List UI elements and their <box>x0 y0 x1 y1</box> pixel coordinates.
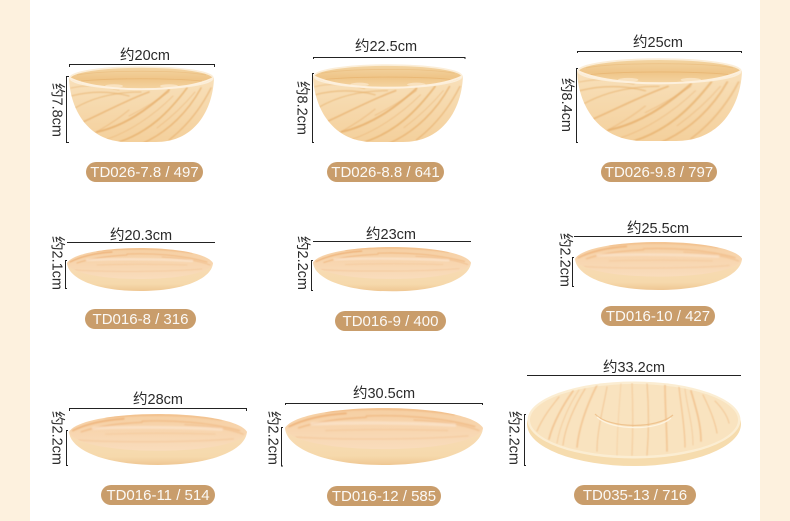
model label: TD016-12 / 585 <box>332 488 436 505</box>
left cream band <box>0 0 30 521</box>
width label: 约23cm <box>366 226 416 243</box>
plate image <box>69 414 247 465</box>
right cream band <box>760 0 790 521</box>
panel: plate TD016-11 <box>48 391 247 505</box>
panel: plate TD016-8 <box>48 227 215 329</box>
model label: TD016-10 / 427 <box>606 308 710 325</box>
height dimension: 约2.2cm <box>294 236 311 290</box>
panel: tray TD035-13 <box>506 359 741 505</box>
height dimension <box>48 76 69 142</box>
width dimension: 约22.5cm <box>355 38 417 55</box>
plate image <box>67 248 213 291</box>
model label: TD016-8 / 316 <box>93 311 188 328</box>
width label: 约25.5cm <box>627 220 689 237</box>
width label: 约20.3cm <box>110 227 172 244</box>
panel: plate TD016-9 <box>294 226 471 331</box>
height dimension: 约2.2cm <box>48 411 66 465</box>
model label: TD035-13 / 716 <box>583 487 687 504</box>
height dimension <box>294 74 314 142</box>
plate image <box>285 408 483 465</box>
plate image <box>313 247 471 291</box>
bowl image <box>69 67 214 144</box>
height dimension <box>558 68 578 142</box>
height dimension: 约7.8cm <box>48 83 66 137</box>
width dimension <box>527 374 741 376</box>
width dimension <box>313 240 471 242</box>
height dimension: 约2.2cm <box>506 411 522 465</box>
width label: 约30.5cm <box>353 385 415 402</box>
panel: plate TD016-10 <box>556 220 742 326</box>
width dimension: 约20cm <box>120 47 170 64</box>
width dimension <box>67 242 215 244</box>
width dimension: 约25cm <box>633 34 683 51</box>
model label: TD016-11 / 514 <box>106 487 210 504</box>
bowl image <box>577 59 742 143</box>
model label: TD016-9 / 400 <box>343 313 438 330</box>
width dimension <box>286 404 482 405</box>
bowl image <box>313 65 463 144</box>
model label: TD026-8.8 / 641 <box>331 164 440 181</box>
tray image <box>527 382 741 466</box>
panel: bowl TD026-7.8 <box>48 47 214 182</box>
panel: plate TD016-12 <box>264 385 483 506</box>
height dimension: 约2.1cm <box>48 236 66 290</box>
width label: 约33.2cm <box>603 359 665 376</box>
model label: TD026-7.8 / 497 <box>90 164 199 181</box>
height dimension: 约8.4cm <box>558 78 575 132</box>
width label: 约28cm <box>133 391 183 408</box>
width dimension <box>574 236 742 238</box>
width dimension <box>70 408 246 411</box>
height dimension: 约2.2cm <box>264 411 282 465</box>
plate image <box>575 242 742 290</box>
model label: TD026-9.8 / 797 <box>605 164 713 181</box>
height dimension: 约8.2cm <box>294 81 310 135</box>
panel: bowl TD026-8.8 <box>294 38 465 182</box>
panel: bowl TD026-9.8 <box>558 34 742 182</box>
height dimension: 约2.2cm <box>556 233 574 287</box>
